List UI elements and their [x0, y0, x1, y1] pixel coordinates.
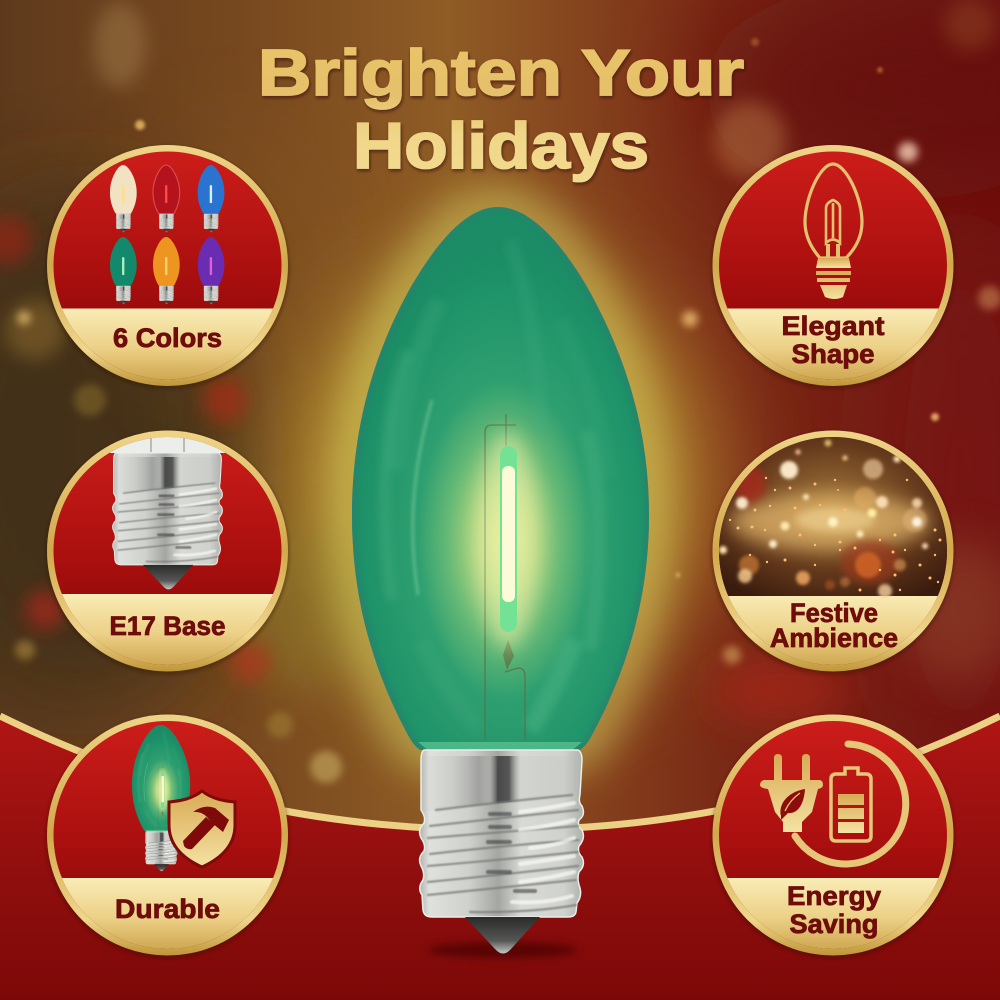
panel: 6 colors: [42, 145, 292, 390]
title: Brighten Your: [258, 36, 744, 109]
icon: six colored bulbs: [110, 165, 224, 304]
label: 6 Colors: 6 Colors: [113, 323, 222, 353]
red swoosh with gold border line: [0, 716, 1000, 1000]
label: Festive Ambience: Festive: [790, 598, 878, 628]
main green bulb: [352, 207, 649, 958]
label: Durable: Durable: [115, 894, 220, 924]
icon: E17 screw base: [110, 425, 225, 589]
icon: bulb outline: [805, 164, 862, 299]
panel: elegant shape: [708, 145, 958, 390]
label: E17 Base: E17 Base: [110, 611, 226, 641]
title: [258, 36, 744, 182]
label line: Saving: Saving: [790, 909, 878, 939]
image: golden bokeh: [715, 435, 951, 598]
icon: bulb with hammer shield: [132, 725, 235, 871]
panel: E17 base: [42, 425, 292, 675]
icon: plug, leaf, battery and cord: [760, 744, 906, 864]
title: Holidays: [353, 109, 649, 182]
label: Energy Saving: Energy: [787, 881, 881, 911]
panel: energy saving: [708, 714, 958, 959]
panel: durable: [42, 714, 292, 959]
label line: Ambience: Ambience: [770, 623, 898, 653]
label line: Shape: Shape: [792, 339, 874, 369]
label: Elegant Shape: Elegant: [782, 311, 885, 341]
panel: festive ambience: [708, 430, 958, 675]
